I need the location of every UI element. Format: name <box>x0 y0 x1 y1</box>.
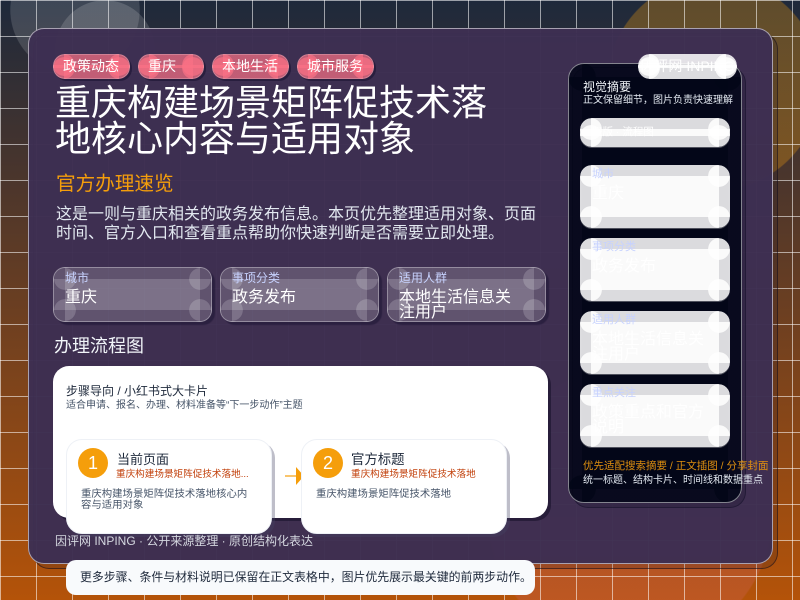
step 2 title: 官方标题 <box>351 452 405 467</box>
step card 2 <box>301 439 507 534</box>
summary card: 重点关注: 重点关注 <box>592 387 636 399</box>
tag: 本地生活 <box>212 54 289 79</box>
step number 1: 1 <box>88 453 98 473</box>
tag: 重庆 <box>138 54 204 79</box>
flow card subheading: 适合申请、报名、办理、材料准备等“下一步动作”主题 <box>66 400 303 411</box>
info card: 事项分类 <box>220 267 379 322</box>
tag: 城市服务: 城市服务 <box>307 58 363 74</box>
tag: 重庆: 重庆 <box>148 58 176 74</box>
info card: 城市: 城市 <box>65 271 89 285</box>
info card: 事项分类: 事项分类 <box>232 271 280 285</box>
info cards <box>53 267 549 325</box>
footer source: 因评网 INPING · 公开来源整理 · 原创结构化表达 <box>55 534 313 548</box>
step number 2: 2 <box>323 453 333 473</box>
summary footer highlight: 优先适配搜索摘要 / 正文插图 / 分享封面 <box>583 460 769 472</box>
step 1 title: 当前页面 <box>117 452 169 467</box>
tag: 政策动态: 政策动态 <box>63 58 119 74</box>
step 1 subtitle: 重庆构建场景矩阵促技术落地... <box>116 469 249 480</box>
bottom note: 更多步骤、条件与材料说明已保留在正文表格中，图片优先展示最关键的前两步动作。 <box>80 570 532 584</box>
summary card: 适用人群: 适用人群 <box>592 314 636 326</box>
summary heading: 视觉摘要 <box>583 80 631 94</box>
summary card: 城市 <box>580 165 730 228</box>
step number 1 <box>78 448 108 478</box>
step number 2 <box>313 448 343 478</box>
visual summary panel shadow <box>572 67 746 508</box>
summary card: 城市: 城市 <box>592 168 614 180</box>
flow card heading: 步骤导向 / 小红书式大卡片 <box>66 384 208 398</box>
info card: 适用人群 <box>387 267 546 322</box>
summary card: 事项分类 <box>580 238 730 301</box>
format card <box>580 118 730 147</box>
tag: 政策动态 <box>53 54 130 79</box>
summary card: 重点关注 <box>580 384 730 447</box>
brand pill <box>638 54 737 79</box>
summary card: 事项分类: 政务发布 <box>592 258 656 275</box>
info card: 城市: 重庆 <box>65 289 97 306</box>
summary card: 重点关注: 政策重点和官方说明 <box>592 404 704 436</box>
summary card: 适用人群 <box>580 311 730 374</box>
info card: 适用人群: 本地生活信息关注用户 <box>399 289 511 321</box>
info card: 城市 <box>53 267 212 322</box>
format card: 竖版 · 流程图 <box>592 126 654 138</box>
flow white card <box>53 366 548 518</box>
subtitle: 官方办理速览 <box>56 173 174 195</box>
tag: 本地生活: 本地生活 <box>222 58 278 74</box>
title: 重庆构建场景矩阵促技术落地核心内容与适用对象 <box>55 82 487 159</box>
step 1 body: 重庆构建场景矩阵促技术落地核心内容与适用对象 <box>81 489 247 511</box>
info card: 适用人群: 适用人群 <box>399 271 447 285</box>
summary card: 适用人群: 本地生活信息关注用户 <box>592 331 704 363</box>
arrow <box>285 467 301 485</box>
visual summary panel <box>568 63 742 503</box>
description: 这是一则与重庆相关的政务发布信息。本页优先整理适用对象、页面时间、官方入口和查看重点帮助你快速判断是否需要立即处理。 <box>56 206 536 242</box>
info card: 事项分类: 政务发布 <box>232 289 296 306</box>
flow heading: 办理流程图 <box>54 336 144 356</box>
tags <box>53 54 376 81</box>
step card 1 <box>66 439 272 534</box>
summary card: 城市: 重庆 <box>592 185 624 202</box>
tag: 城市服务 <box>297 54 374 79</box>
step 2 body: 重庆构建场景矩阵促技术落地 <box>316 489 451 500</box>
summary footer text: 统一标题、结构卡片、时间线和数据重点 <box>583 475 763 486</box>
brand pill: 因评网 INPING <box>640 58 735 74</box>
summary card: 事项分类: 事项分类 <box>592 241 636 253</box>
bottom note <box>66 560 535 595</box>
step 2 subtitle: 重庆构建场景矩阵促技术落地 <box>351 469 476 480</box>
summary subheading: 正文保留细节，图片负责快速理解 <box>583 95 733 106</box>
